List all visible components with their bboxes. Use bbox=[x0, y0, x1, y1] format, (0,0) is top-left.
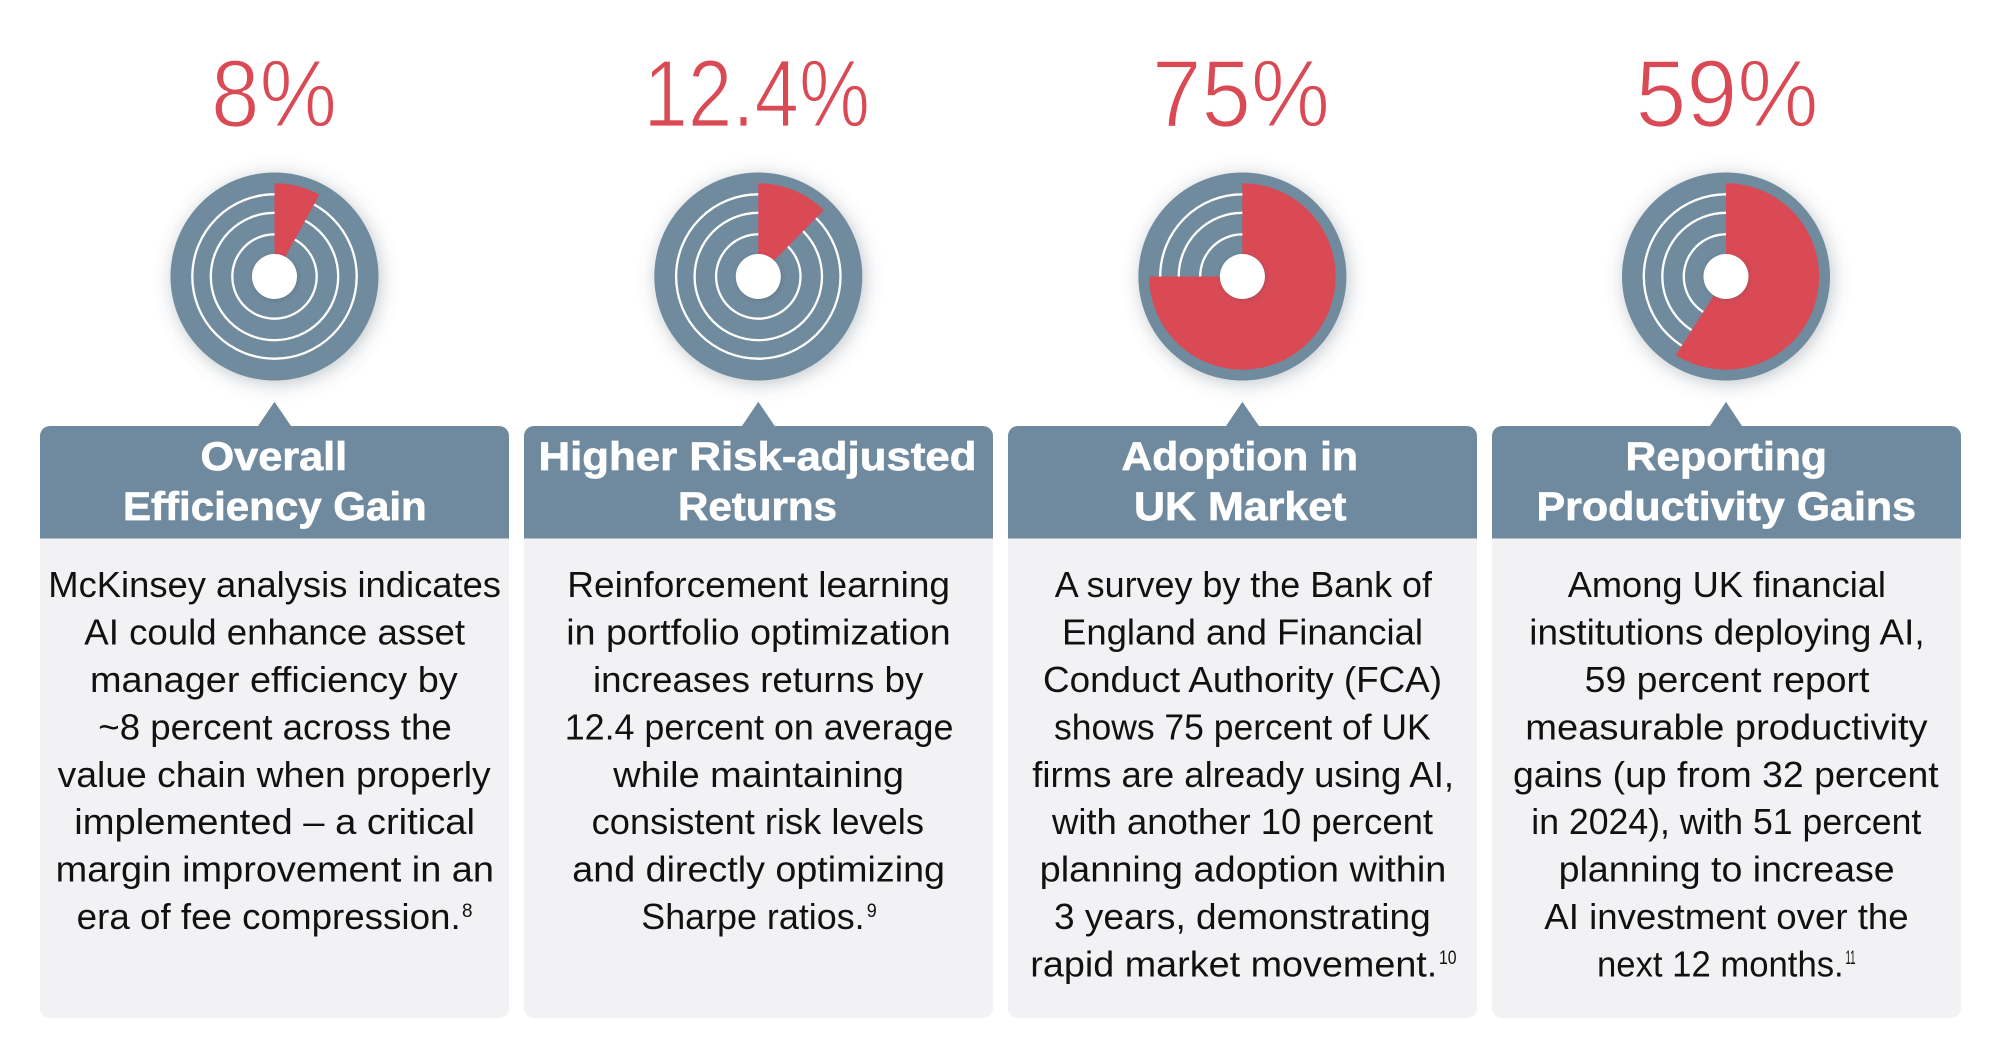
text block: UK financial institutions bbox=[1492, 538, 1961, 1018]
text block: UK financial institutions: in 2024), with 51 percent bbox=[1531, 801, 1921, 842]
text block: McKinsey analysis: ~8 percent across the bbox=[98, 706, 452, 747]
text block: McKinsey analysis bbox=[40, 538, 509, 1018]
radial chart: 75 percent bbox=[1138, 172, 1346, 380]
text block: McKinsey analysis: implemented – a critical bbox=[74, 801, 475, 842]
panel: adoption in UK market bbox=[1008, 41, 1477, 1018]
panel: higher risk-adjusted returns bbox=[524, 41, 993, 1018]
text block: reinforcement learning: 9 bbox=[867, 901, 877, 922]
text block: Bank of England survey: planning adoption within bbox=[1040, 849, 1446, 890]
text block: Bank of England survey: Conduct Authority (FCA) bbox=[1043, 659, 1442, 700]
text block: McKinsey analysis: margin improvement in an bbox=[56, 849, 494, 890]
text block: McKinsey analysis: value chain when properly bbox=[58, 754, 491, 795]
text block: reinforcement learning: consistent risk levels bbox=[592, 801, 924, 842]
text block: UK financial institutions: 11 bbox=[1846, 948, 1856, 969]
text block: Bank of England survey: with another 10 percent bbox=[1051, 801, 1433, 842]
text block: reinforcement learning: Reinforcement learning bbox=[567, 564, 950, 605]
text block: UK financial institutions: measurable productivity bbox=[1525, 706, 1928, 747]
text block: Bank of England survey: England and Financial bbox=[1062, 612, 1423, 653]
heading: Adoption in UK Market: Adoption in bbox=[1122, 435, 1358, 479]
statistic: 8%: 8% bbox=[211, 41, 337, 148]
statistic: 59%: 59% bbox=[1636, 41, 1818, 148]
heading: Higher Risk-adjusted Returns: Returns bbox=[678, 485, 837, 529]
heading: Overall Efficiency Gain: Overall bbox=[200, 435, 347, 479]
heading: Overall Efficiency Gain: Efficiency Gain bbox=[123, 485, 427, 529]
radial chart: 8 percent bbox=[170, 172, 378, 380]
text block: UK financial institutions: AI investment over the bbox=[1544, 896, 1909, 937]
panel: reporting productivity gains bbox=[1492, 41, 1961, 1018]
text block: reinforcement learning: in portfolio optimization bbox=[566, 612, 951, 653]
text block: Bank of England survey: 10 bbox=[1439, 948, 1456, 969]
text block: Bank of England survey: firms are already using AI, bbox=[1032, 754, 1454, 795]
text block: Bank of England survey bbox=[1008, 538, 1477, 1018]
text block: McKinsey analysis: manager efficiency by bbox=[90, 659, 458, 700]
heading: Reporting Productivity Gains: Reporting bbox=[1626, 435, 1827, 479]
text block: reinforcement learning bbox=[524, 538, 993, 1018]
text block: reinforcement learning: and directly optimizing bbox=[572, 849, 945, 890]
text block: Bank of England survey: rapid market movement. bbox=[1030, 943, 1437, 984]
heading: Adoption in UK Market bbox=[1008, 402, 1477, 538]
text block: UK financial institutions: planning to increase bbox=[1559, 849, 1895, 890]
text block: Bank of England survey: A survey by the Bank of bbox=[1055, 564, 1433, 605]
text block: McKinsey analysis: era of fee compression. bbox=[77, 896, 461, 937]
heading: Reporting Productivity Gains: Productivity Gains bbox=[1536, 485, 1916, 529]
text block: UK financial institutions: gains (up from 32 percent bbox=[1513, 754, 1939, 795]
text block: reinforcement learning: while maintaining bbox=[612, 754, 904, 795]
text block: McKinsey analysis: 8 bbox=[462, 901, 472, 922]
statistic: 12.4%: 12.4% bbox=[644, 41, 870, 148]
text block: reinforcement learning: increases returns by bbox=[593, 659, 923, 700]
text block: UK financial institutions: 59 percent report bbox=[1585, 659, 1869, 700]
text block: McKinsey analysis: McKinsey analysis indicates bbox=[48, 564, 501, 605]
radial chart: 59 percent bbox=[1622, 172, 1830, 380]
heading: Higher Risk-adjusted Returns: Higher Risk-adjusted bbox=[538, 435, 976, 479]
text block: reinforcement learning: Sharpe ratios. bbox=[641, 896, 865, 937]
heading: Overall Efficiency Gain bbox=[40, 402, 509, 538]
statistic: 75%: 75% bbox=[1152, 41, 1330, 148]
heading: Higher Risk-adjusted Returns bbox=[524, 402, 993, 538]
text block: Bank of England survey: shows 75 percent of UK bbox=[1054, 706, 1431, 747]
text block: UK financial institutions: institutions deploying AI, bbox=[1529, 612, 1925, 653]
text block: Bank of England survey: 3 years, demonstrating bbox=[1054, 896, 1431, 937]
text block: McKinsey analysis: AI could enhance asset bbox=[84, 612, 465, 653]
heading: Reporting Productivity Gains bbox=[1492, 402, 1961, 538]
text block: UK financial institutions: next 12 months. bbox=[1597, 943, 1844, 984]
text block: UK financial institutions: Among UK financial bbox=[1568, 564, 1886, 605]
radial chart: 12.4 percent bbox=[654, 172, 862, 380]
panel: overall efficiency gain bbox=[40, 41, 509, 1018]
text block: reinforcement learning: 12.4 percent on average bbox=[565, 706, 953, 747]
heading: Adoption in UK Market: UK Market bbox=[1134, 485, 1346, 529]
